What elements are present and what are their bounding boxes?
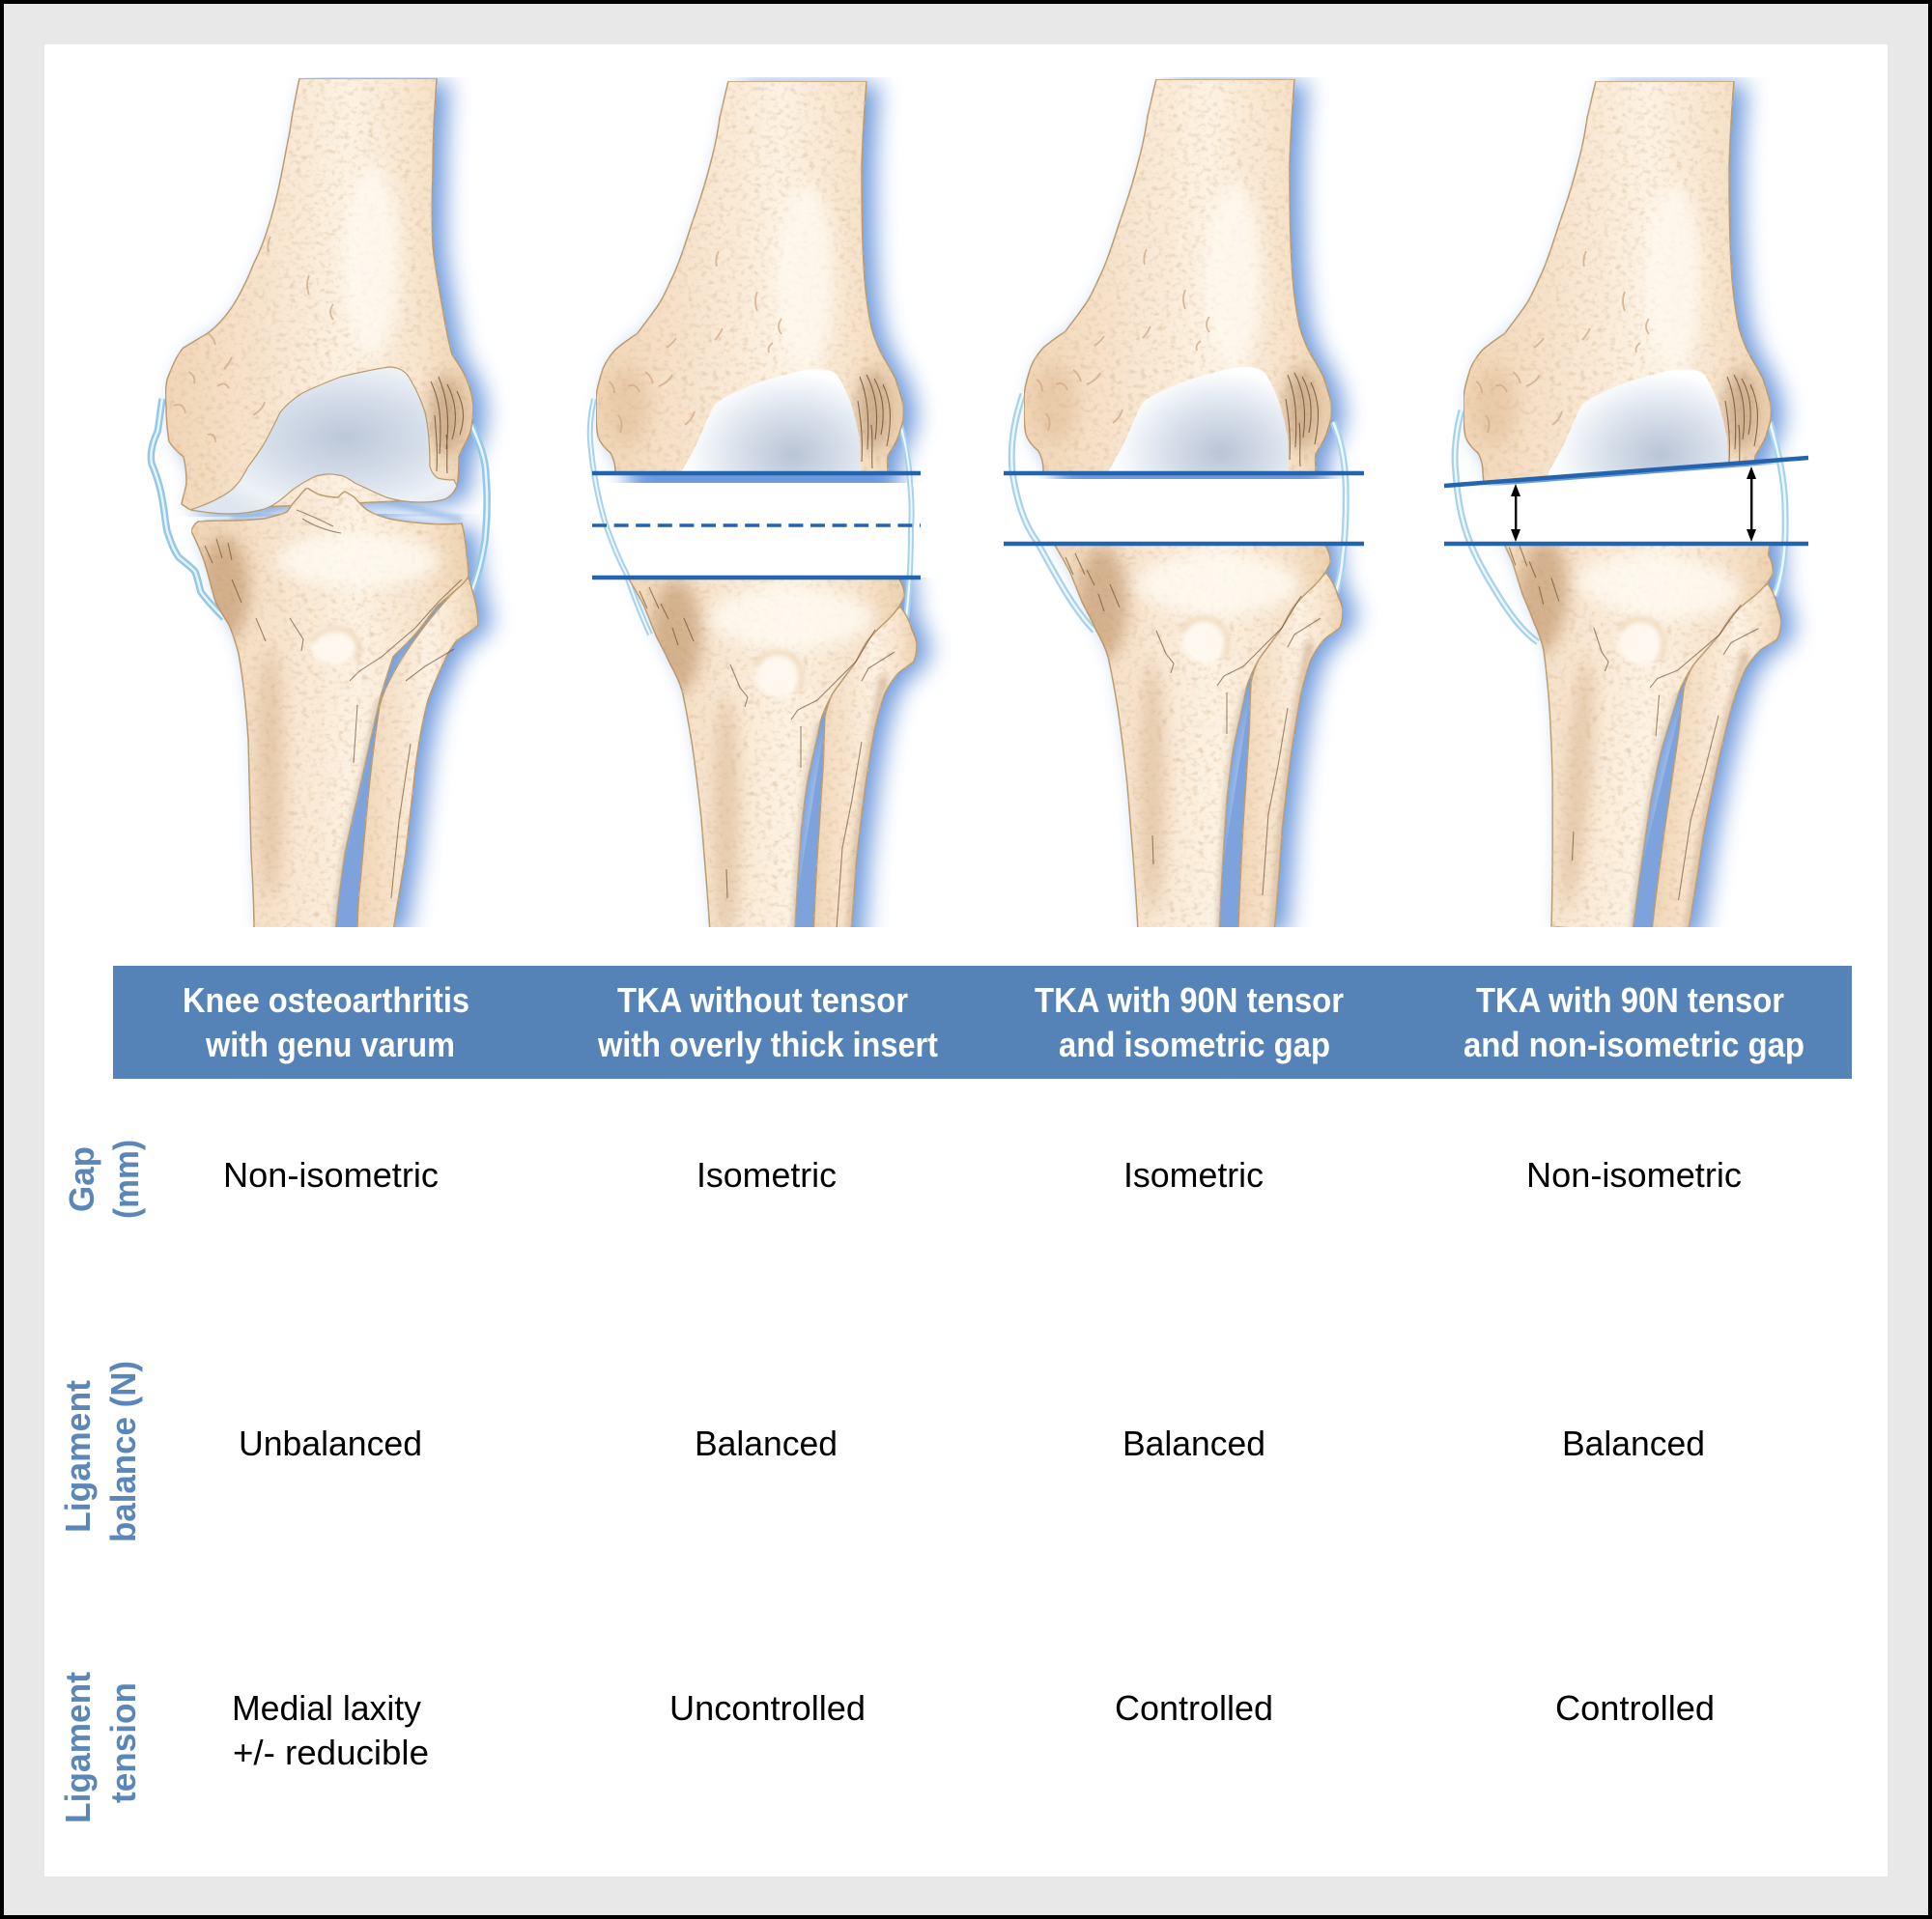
header: TKA with 90N tensor, isometric: TKA with 90N tensor xyxy=(1035,980,1344,1020)
header: TKA with 90N tensor, isometric xyxy=(1035,980,1344,1064)
row label: gap: Gap xyxy=(62,1146,101,1212)
row: ligament balance values: Balanced xyxy=(1562,1424,1705,1463)
row: ligament tension values: Medial laxity xyxy=(232,1688,421,1728)
header: TKA with 90N tensor, isometric: and isometric gap xyxy=(1059,1025,1330,1064)
row: ligament tension values: +/- reducible xyxy=(233,1733,429,1772)
tibia and fibula, knee 2 xyxy=(628,579,917,927)
header: knee osteoarthritis: Knee osteoarthritis xyxy=(183,980,469,1020)
row: ligament balance values: Unbalanced xyxy=(239,1424,422,1463)
row: gap values: Isometric xyxy=(1123,1155,1264,1195)
blue shadow, tibia, knee 2 xyxy=(622,578,945,927)
row: ligament balance values: Balanced xyxy=(1122,1424,1265,1463)
knee 3: TKA with 90N tensor, isometric gap xyxy=(1004,79,1364,935)
gap lines, knee 3 xyxy=(1004,473,1364,544)
row: ligament tension values xyxy=(232,1688,1715,1772)
row: gap values: Isometric xyxy=(696,1155,837,1195)
row: gap values xyxy=(223,1155,1742,1195)
header band xyxy=(113,966,1852,1079)
row: ligament tension values: Uncontrolled xyxy=(669,1688,866,1728)
row label: ligament tension: tension xyxy=(103,1682,143,1803)
femur, knee 1 xyxy=(165,78,473,514)
femur, knee 2 xyxy=(596,81,903,507)
medial and lateral ligaments, knee 1 xyxy=(151,399,487,618)
blue shadow, tibia, knee 3 xyxy=(1054,510,1355,935)
blue shadow behind femur, knee 1 xyxy=(178,82,486,514)
row label: gap xyxy=(62,1140,146,1219)
row label: ligament tension: Ligament xyxy=(58,1672,98,1823)
row: gap values: Non-isometric xyxy=(223,1155,439,1195)
knee 2: TKA without tensor, overly thick insert xyxy=(590,81,929,969)
header: TKA without tensor: TKA without tensor xyxy=(617,980,908,1020)
blue shadow, femur, knee 4 xyxy=(1476,84,1783,510)
arrow: wide lateral gap xyxy=(1747,466,1756,542)
row: ligament balance values xyxy=(239,1424,1705,1463)
header: TKA with 90N tensor, non-isometric: TKA with 90N tensor xyxy=(1476,980,1784,1020)
arrow: narrow medial gap xyxy=(1511,484,1520,542)
femur, knee 4 xyxy=(1463,81,1771,507)
ligaments, knee 3 xyxy=(1011,394,1346,631)
gap lines, knee 2 xyxy=(592,473,921,578)
row label: ligament tension xyxy=(58,1672,143,1823)
femur, knee 3 xyxy=(1024,79,1331,505)
row: ligament tension values: Controlled xyxy=(1555,1688,1715,1728)
row label: gap: (mm) xyxy=(106,1140,146,1219)
header: TKA without tensor xyxy=(597,980,938,1064)
row label: ligament balance: Ligament xyxy=(58,1380,98,1533)
tibia and fibula, knee 3 xyxy=(1055,546,1343,927)
blue shadow, femur, knee 2 xyxy=(609,84,916,510)
ligaments, knee 2 xyxy=(590,399,912,635)
header: TKA with 90N tensor, non-isometric xyxy=(1463,980,1804,1064)
header: TKA without tensor: with overly thick insert xyxy=(597,1025,938,1064)
row label: ligament balance: balance (N) xyxy=(103,1361,143,1542)
cartilage, knee 1 xyxy=(190,367,457,514)
joint space halo, knee 1 xyxy=(232,482,462,520)
row: gap values: Non-isometric xyxy=(1526,1155,1742,1195)
header: TKA with 90N tensor, non-isometric: and non-isometric gap xyxy=(1463,1025,1804,1064)
blue shadow, femur, knee 3 xyxy=(1037,82,1344,508)
ligaments, knee 4 xyxy=(1455,410,1785,642)
header: knee osteoarthritis xyxy=(183,980,469,1064)
header: knee osteoarthritis: with genu varum xyxy=(205,1025,455,1064)
row: ligament balance values: Balanced xyxy=(695,1424,838,1463)
knee 1: osteoarthritis with genu varum xyxy=(151,78,491,936)
blue shadow, tibia, knee 4 xyxy=(1497,546,1810,927)
gap lines, knee 4 xyxy=(1444,458,1808,544)
row label: ligament balance xyxy=(58,1361,143,1542)
row: ligament tension values: Controlled xyxy=(1115,1688,1273,1728)
blue shadow behind tibia, knee 1 xyxy=(204,492,491,936)
tibia and fibula, knee 4 xyxy=(1504,546,1781,927)
tibia and fibula, knee 1 xyxy=(191,488,478,932)
knee 4: TKA with 90N tensor, non-isometric gap xyxy=(1444,81,1808,945)
